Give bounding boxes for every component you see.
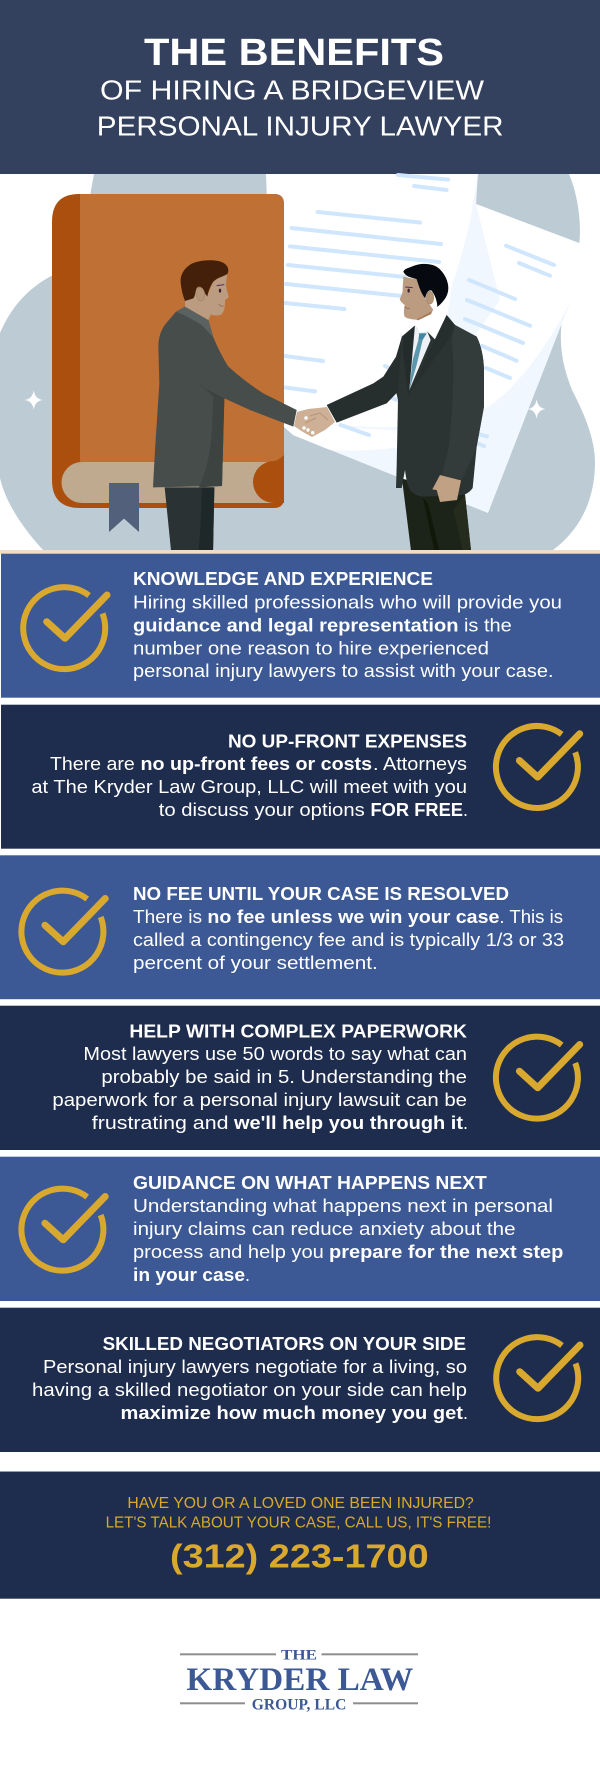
body text: at The Kryder Law Group, LLC will meet with you bbox=[31, 777, 467, 797]
body text bbox=[52, 1044, 468, 1133]
icon: check circle bbox=[23, 587, 107, 669]
heading: HELP WITH COMPLEX PAPERWORK bbox=[129, 1020, 468, 1041]
body text bbox=[133, 592, 562, 681]
body text: There are bbox=[50, 754, 135, 774]
body text: personal injury lawyers to assist with your case. bbox=[133, 661, 554, 681]
heading: SKILLED NEGOTIATORS ON YOUR SIDE bbox=[103, 1333, 466, 1354]
body text: is the bbox=[464, 615, 512, 635]
panel: knowledge and experience bbox=[1, 554, 600, 698]
body text: injury claims can reduce anxiety about the bbox=[133, 1219, 516, 1239]
body text: . bbox=[245, 1265, 250, 1285]
body text: probably be said in 5. Understanding the bbox=[101, 1067, 467, 1087]
body text: no up-front fees or costs bbox=[140, 754, 372, 774]
body text: FOR FREE bbox=[370, 800, 463, 820]
logo: The Kryder Law Group, LLC: KRYDER LAW bbox=[186, 1662, 413, 1698]
panel: no up-front expenses bbox=[1, 705, 600, 849]
header banner bbox=[0, 0, 600, 174]
logo: The Kryder Law Group, LLC bbox=[180, 1648, 418, 1713]
illustration: two professionals shaking hands in front of a law book bbox=[0, 174, 600, 554]
phone number: (312) 223-1700 bbox=[170, 1537, 429, 1574]
logo: The Kryder Law Group, LLC: GROUP, LLC bbox=[252, 1696, 346, 1713]
title bbox=[97, 32, 504, 142]
icon: check circle bbox=[21, 1189, 105, 1271]
body text: . bbox=[463, 1403, 468, 1423]
body text bbox=[133, 1196, 563, 1285]
body text: maximize how much money you get bbox=[120, 1403, 463, 1423]
body text: in your case bbox=[133, 1265, 245, 1285]
body text: . bbox=[463, 800, 468, 820]
handshake bbox=[294, 407, 335, 437]
panel: no fee until your case is resolved bbox=[0, 855, 600, 999]
callout text bbox=[106, 1495, 491, 1531]
body text: percent of your settlement. bbox=[133, 953, 378, 973]
sparkle left bbox=[24, 390, 43, 410]
panel: help with complex paperwork bbox=[0, 1006, 600, 1150]
heading: KNOWLEDGE AND EXPERIENCE bbox=[133, 568, 433, 589]
heading: NO FEE UNTIL YOUR CASE IS RESOLVED bbox=[133, 883, 509, 904]
body text: Most lawyers use 50 words to say what can bbox=[83, 1044, 467, 1064]
callout text: LET'S TALK ABOUT YOUR CASE, CALL US, IT'S FREE! bbox=[106, 1514, 491, 1531]
background blob bbox=[0, 174, 595, 550]
cream floor strip bbox=[0, 550, 600, 554]
panel: call to action bbox=[0, 1471, 600, 1599]
icon: check circle bbox=[496, 1037, 580, 1119]
man on the left bbox=[153, 260, 297, 554]
body text bbox=[133, 907, 564, 973]
bookmark bbox=[109, 483, 139, 532]
panel: guidance on what happens next bbox=[0, 1157, 600, 1301]
body text: process and help you bbox=[133, 1242, 324, 1262]
body text bbox=[31, 754, 468, 820]
heading: NO UP-FRONT EXPENSES bbox=[228, 730, 467, 751]
body text: no fee unless we win your case bbox=[207, 907, 499, 927]
man on the right bbox=[327, 264, 484, 553]
body text: frustrating and bbox=[92, 1113, 228, 1133]
body text: having a skilled negotiator on your side can help bbox=[32, 1380, 467, 1400]
documents bbox=[266, 174, 592, 513]
body text: guidance and legal representation bbox=[133, 615, 458, 635]
body text: There is bbox=[133, 907, 202, 927]
body text: . bbox=[463, 1113, 468, 1133]
body text: number one reason to hire experienced bbox=[133, 638, 489, 658]
body text: Understanding what happens next in personal bbox=[133, 1196, 553, 1216]
body text: to discuss your options bbox=[159, 800, 365, 820]
icon: check circle bbox=[21, 891, 105, 973]
title: OF HIRING A BRIDGEVIEW bbox=[100, 74, 485, 105]
body text: . This is bbox=[499, 907, 563, 927]
title: THE BENEFITS bbox=[144, 32, 444, 74]
title: PERSONAL INJURY LAWYER bbox=[97, 111, 504, 142]
body text: Hiring skilled professionals who will provide you bbox=[133, 592, 562, 612]
body text: . Attorneys bbox=[373, 754, 467, 774]
panel: skilled negotiators on your side bbox=[0, 1308, 600, 1452]
body text: we'll help you through it bbox=[233, 1113, 463, 1133]
body text: prepare for the next step bbox=[329, 1242, 563, 1262]
body text bbox=[32, 1357, 468, 1423]
callout text: HAVE YOU OR A LOVED ONE BEEN INJURED? bbox=[127, 1495, 474, 1512]
body text: paperwork for a personal injury lawsuit can be bbox=[52, 1090, 467, 1110]
sparkle right bbox=[528, 399, 546, 419]
logo: The Kryder Law Group, LLC: THE bbox=[281, 1648, 317, 1664]
icon: check circle bbox=[496, 1337, 580, 1419]
body text: Personal injury lawyers negotiate for a living, so bbox=[43, 1357, 467, 1377]
icon: check circle bbox=[496, 726, 580, 808]
body text: called a contingency fee and is typically 1/3 or 33 bbox=[133, 930, 564, 950]
heading: GUIDANCE ON WHAT HAPPENS NEXT bbox=[133, 1172, 488, 1193]
book bbox=[52, 194, 284, 532]
